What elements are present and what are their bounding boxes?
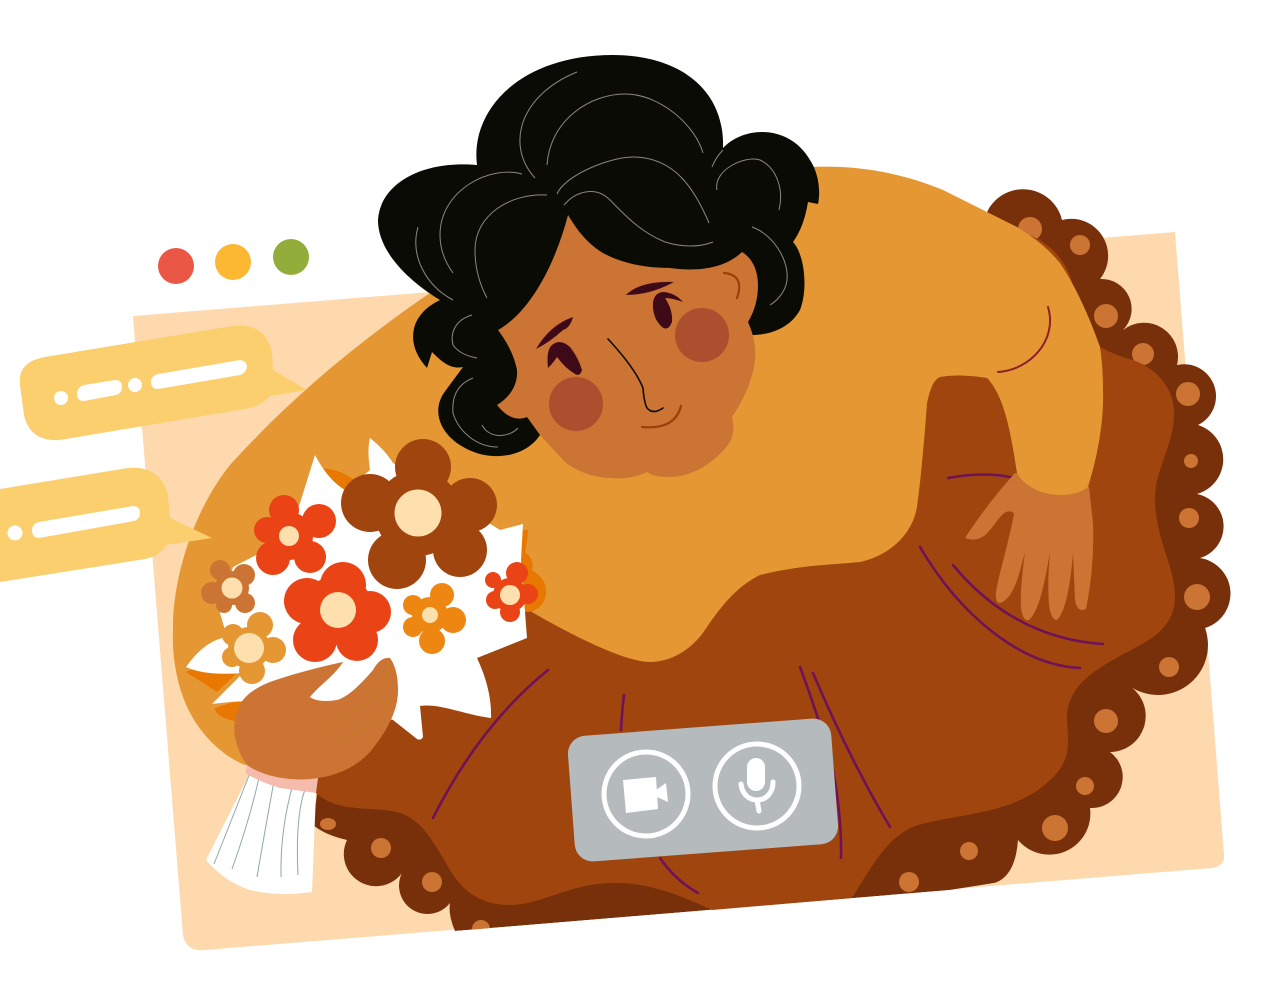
ear <box>724 273 739 298</box>
flower: tan <box>201 560 255 613</box>
frill polka dots <box>320 217 1210 938</box>
control card: video and microphone buttons <box>567 717 839 863</box>
dress: brown skirt <box>300 232 1175 910</box>
dress frill: dark scalloped hem <box>313 189 1230 938</box>
smile <box>642 406 681 427</box>
flower: small red right <box>485 562 538 622</box>
nose <box>608 339 663 412</box>
flower: orange <box>403 583 466 654</box>
hair: black curls <box>378 55 819 456</box>
dress fold lines <box>433 474 1103 893</box>
panel: peach video window <box>133 232 1224 950</box>
flower: small red upper <box>254 495 336 575</box>
left hand holding bouquet <box>234 658 398 779</box>
window control dots <box>158 239 309 284</box>
bouquet white paper <box>186 438 527 740</box>
pink wristband <box>245 765 318 793</box>
sweater crease <box>998 307 1050 372</box>
sleeve: white cuff with pleats <box>206 765 318 894</box>
bouquet: paper and flowers <box>186 438 546 740</box>
speech bubble: upper <box>20 326 307 440</box>
flower: large red <box>284 562 391 662</box>
speech bubble: lower <box>0 468 212 582</box>
icon: camera button <box>604 752 688 836</box>
icon: microphone button <box>715 744 799 828</box>
face <box>497 215 758 478</box>
right hand resting on skirt <box>965 473 1093 620</box>
sweater: orange body and arm <box>173 167 1103 765</box>
flower: amber <box>222 612 286 684</box>
flower: large brown <box>341 439 497 589</box>
cheeks <box>549 308 729 431</box>
bouquet orange backing <box>186 468 546 722</box>
hair strands <box>416 72 787 447</box>
eyes and eyebrows <box>536 282 683 375</box>
